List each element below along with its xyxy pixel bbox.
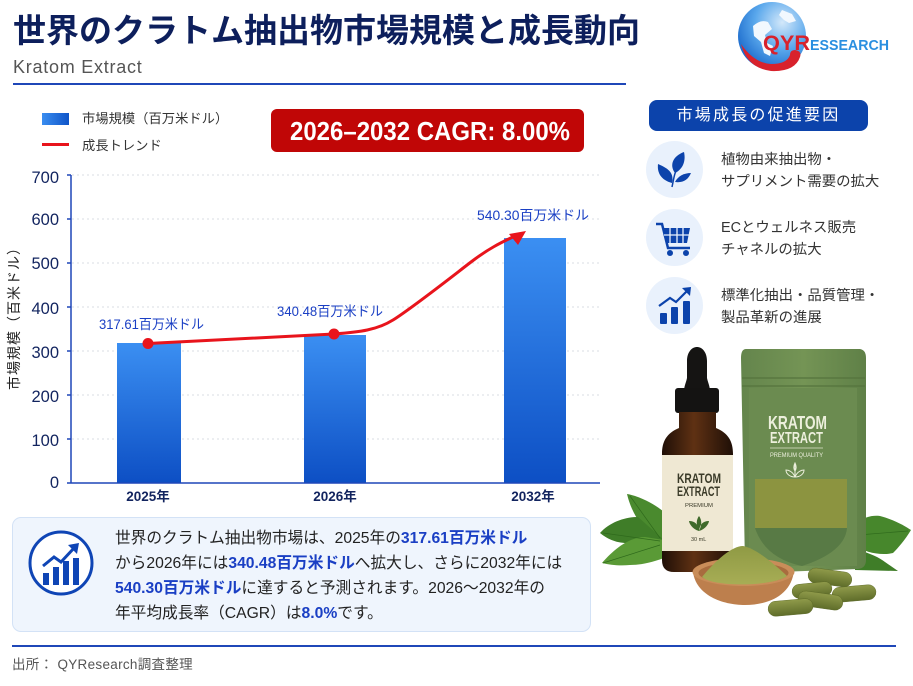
summary text: 年平均成長率（CAGR）は8.0%です。: [115, 604, 383, 622]
drivers heading: 市場成長の促進要因: [677, 107, 840, 124]
driver 2: [646, 209, 856, 266]
summary text: 世界のクラトム抽出物市場は、2025年の317.61百万米ドル: [115, 530, 527, 546]
y axis labels: 100: [31, 432, 59, 450]
logo: QYResearch: [738, 2, 889, 72]
y axis labels: 500: [31, 255, 59, 273]
CAGR badge: [271, 109, 584, 152]
pouch label: KRATOM: [768, 413, 827, 433]
pouch label: EXTRACT: [770, 430, 823, 447]
y axis labels: 400: [31, 300, 59, 318]
summary text: [115, 529, 562, 622]
drivers heading: [649, 100, 868, 131]
logo: QYResearch: ESSEARCH: [810, 38, 889, 54]
driver 1: [646, 141, 879, 198]
driver text: 製品革新の進展: [721, 310, 822, 326]
driver text: [721, 288, 879, 326]
legend label: market size: 市場規模（百万米ドル）: [82, 111, 228, 126]
icon: growth chart: [28, 530, 94, 596]
CAGR badge: 2026–2032 CAGR: 8.00%: [290, 118, 570, 146]
title: 世界のクラトム抽出物市場規模と成長動向: [13, 12, 640, 49]
icon: leaf: [646, 141, 703, 198]
x axis labels: 2032年: [511, 488, 555, 504]
bowl of powder: [692, 546, 794, 605]
capsules: [767, 567, 877, 617]
driver text: 植物由来抽出物・: [721, 152, 836, 168]
dropper bottle: [662, 347, 733, 572]
driver text: 標準化抽出・品質管理・: [721, 288, 879, 304]
driver text: サプリメント需要の拡大: [721, 174, 879, 190]
dropper bottle: EXTRACT: [677, 483, 720, 499]
x axis labels: [126, 488, 555, 504]
legend label: growth trend: 成長トレンド: [82, 138, 162, 153]
legend line: growth trend: [42, 143, 69, 146]
dropper bottle: PREMIUM: [685, 503, 713, 509]
y axis labels: 600: [31, 211, 59, 229]
bars: [117, 238, 566, 483]
y axis title: 市場規模（百米ドル）: [6, 241, 22, 390]
legend: [42, 111, 228, 153]
y axis labels: 700: [31, 169, 59, 187]
source note: 出所： QYResearch調査整理: [12, 657, 193, 672]
driver text: チャネルの拡大: [721, 242, 822, 258]
subtitle: Kratom Extract: [13, 57, 143, 77]
panel: growth drivers: [646, 100, 879, 334]
summary text: から2026年には340.48百万米ドルへ拡大し、さらに2032年には: [115, 554, 562, 572]
product illustration: [600, 347, 911, 616]
pouch label: [768, 413, 827, 459]
icon: cart: [646, 209, 703, 266]
legend swatch: market size: [42, 113, 69, 125]
driver text: ECとウェルネス販売: [721, 220, 856, 236]
driver text: [721, 152, 879, 190]
y axis labels: 300: [31, 344, 59, 362]
logo: QYResearch: QYR: [763, 32, 810, 55]
pouch: [741, 349, 866, 573]
leaves: [600, 494, 911, 571]
summary text: 540.30百万米ドルに達すると予測されます。2026～2032年の: [115, 580, 545, 596]
pouch label: PREMIUM QUALITY: [770, 452, 824, 459]
x axis labels: 2025年: [126, 488, 170, 504]
data labels: 317.61百万米ドル: [99, 317, 204, 332]
y axis labels: 0: [50, 474, 59, 492]
driver text: [721, 220, 856, 258]
y axis labels: 200: [31, 388, 59, 406]
data labels: 540.30百万米ドル: [477, 208, 589, 223]
bar chart: [6, 169, 600, 504]
trend line: [142, 231, 526, 349]
icon: growth bars: [646, 277, 703, 334]
y axis labels: [31, 169, 59, 492]
data labels: 340.48百万米ドル: [277, 304, 383, 319]
dropper bottle: KRATOM: [677, 470, 721, 486]
driver 3: [646, 277, 879, 334]
summary panel: [12, 517, 591, 632]
x axis labels: 2026年: [313, 488, 357, 504]
dropper bottle: 30 mL: [691, 537, 706, 543]
data labels: [99, 208, 589, 332]
